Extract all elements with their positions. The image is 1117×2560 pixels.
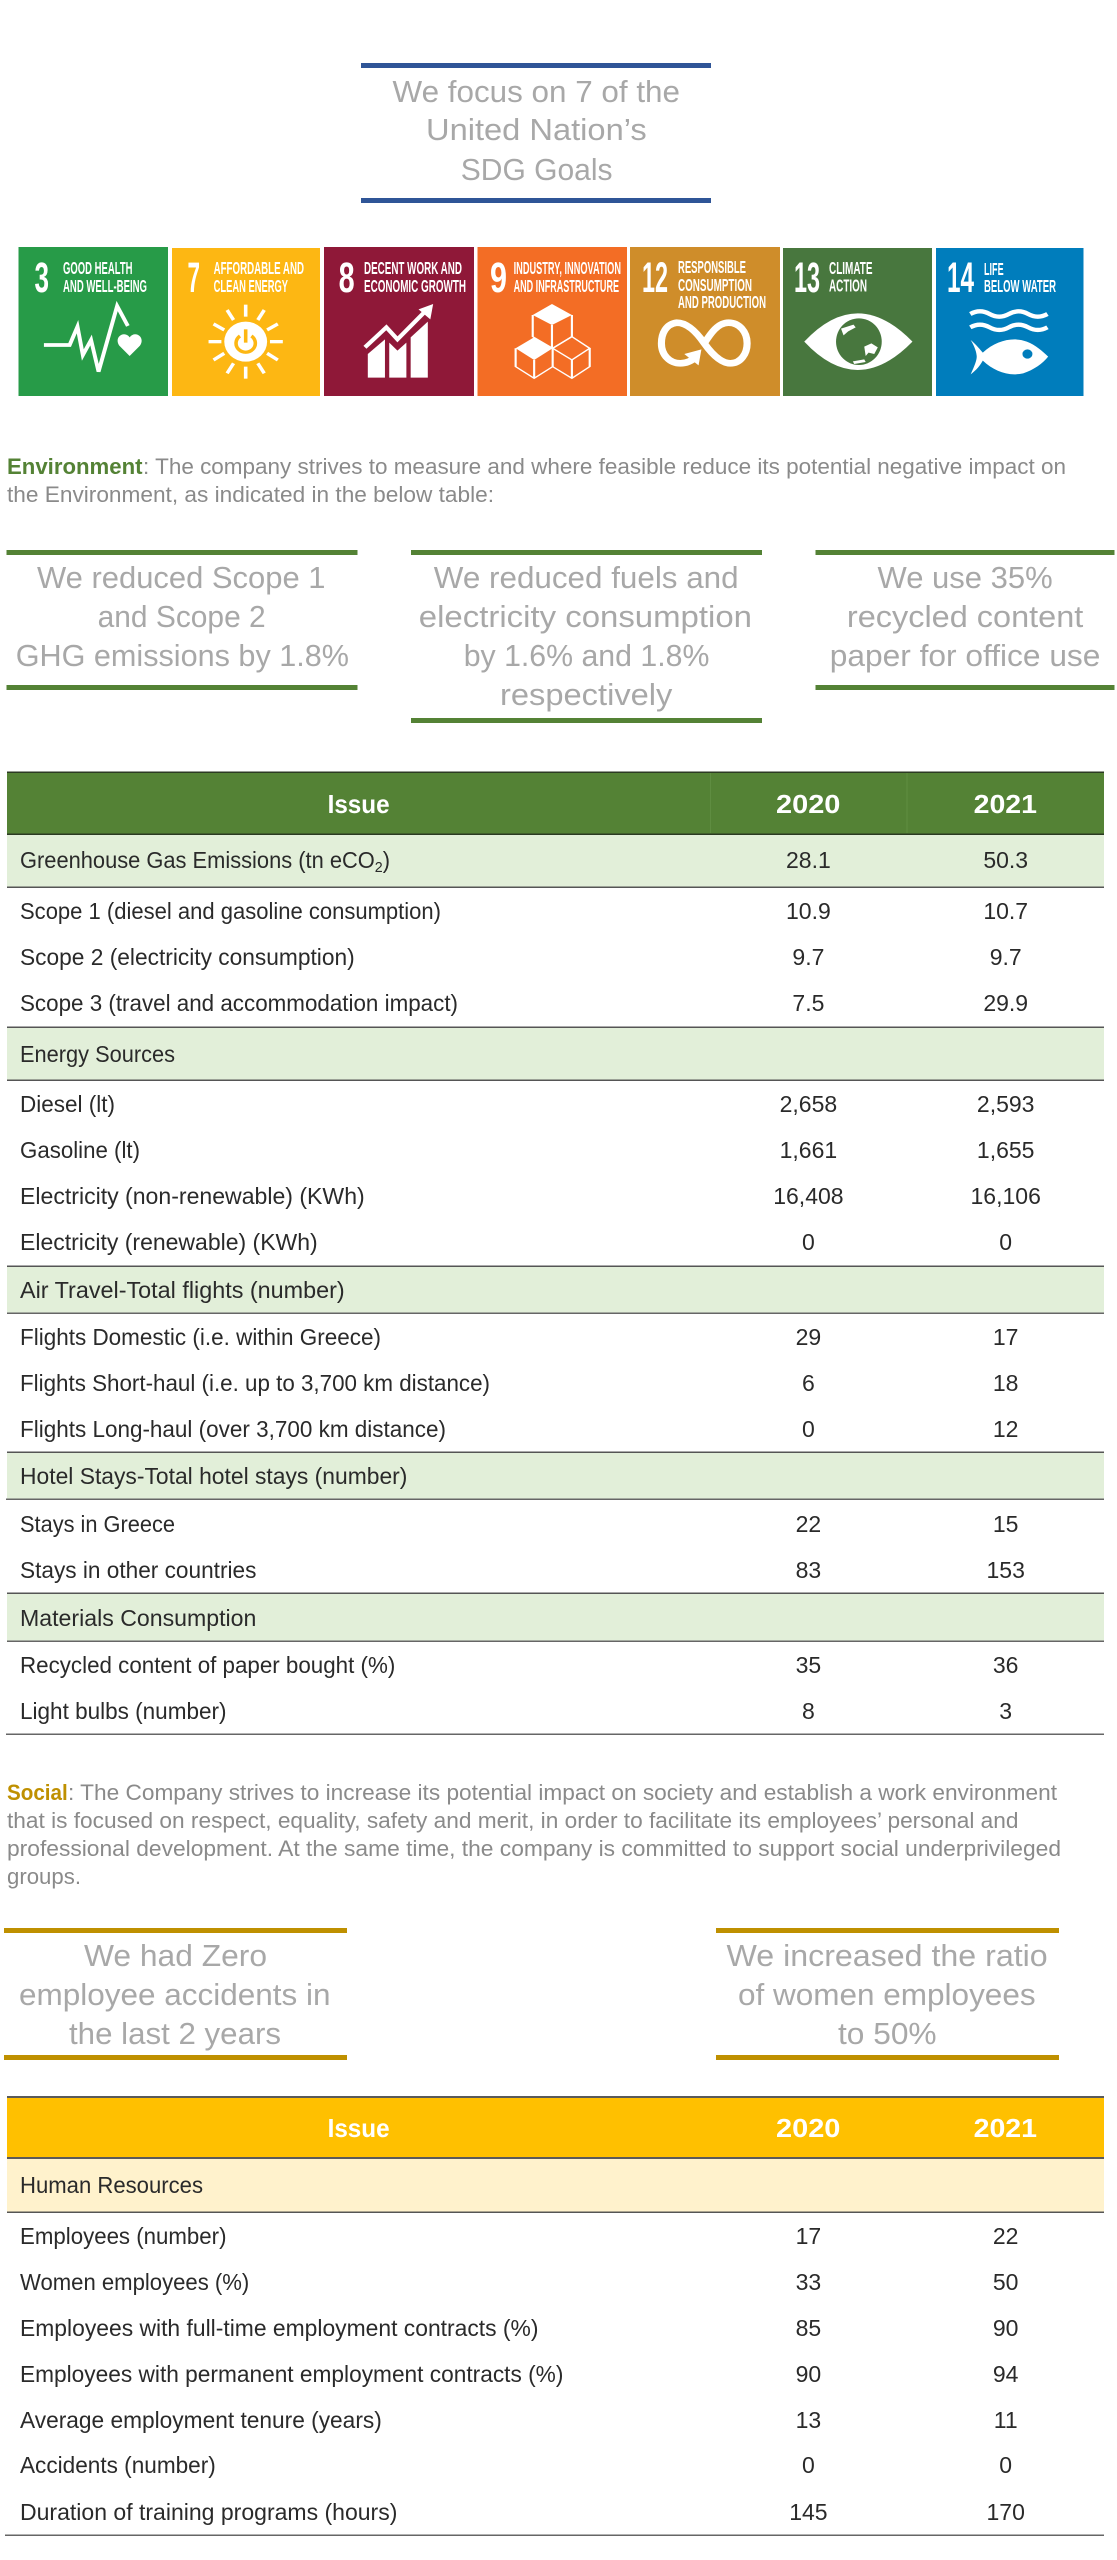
- tile: goal 14 life below water: [936, 248, 1084, 396]
- tile: goal 8 decent work and economic growth: 8: [339, 254, 355, 302]
- social intro text: Social: [7, 1780, 68, 1805]
- row: gasoline: 1,661: [780, 1137, 837, 1163]
- row: training duration: [5, 2499, 1104, 2536]
- row: permanent contracts: Employees with permanent employment contracts (%): [20, 2361, 563, 2387]
- social table header: Issue: [328, 2113, 390, 2143]
- row: accidents: 0: [999, 2452, 1012, 2478]
- tile: goal 8 decent work and economic growth: [324, 247, 474, 396]
- row: flights long-haul: 0: [802, 1416, 815, 1442]
- tile: goal 3 good health and well-being: AND WELL-BEING: [63, 276, 147, 296]
- SDG goal tiles row: [18, 247, 1084, 396]
- tile: goal 7 affordable and clean energy: CLEAN ENERGY: [214, 276, 288, 296]
- environment table header: 2021: [974, 789, 1037, 819]
- row: flights long-haul: 12: [993, 1416, 1018, 1442]
- callout: zero accidents: We had Zero: [84, 1938, 267, 1973]
- tile: goal 9 industry, innovation and infrastructure: 9: [490, 254, 507, 302]
- social table header: [7, 2096, 1104, 2159]
- row: electricity renewable: 0: [802, 1229, 815, 1255]
- row group: hotel stays: [6, 1452, 1104, 1500]
- row: accidents: 0: [802, 2452, 815, 2478]
- social table: [5, 2096, 1104, 2536]
- row group: materials consumption: Materials Consumption: [20, 1605, 256, 1631]
- row: average tenure: [20, 2407, 1018, 2433]
- row: stays in Greece: 22: [796, 1511, 821, 1537]
- row: scope 2: 9.7: [990, 944, 1022, 970]
- environment intro text: [7, 454, 1066, 507]
- row: average tenure: Average employment tenure (years): [20, 2407, 382, 2433]
- row: employees: [20, 2223, 1018, 2249]
- environment intro text: the Environment, as indicated in the below table:: [7, 482, 494, 507]
- social intro text: that is focused on respect, equality, safety and merit, in order to facilitate its employees’ personal and: [7, 1808, 1018, 1833]
- row: permanent contracts: 90: [796, 2361, 821, 2387]
- row group: greenhouse gas emissions: [7, 835, 1104, 888]
- row: flights long-haul: Flights Long-haul (over 3,700 km distance): [20, 1416, 446, 1442]
- row: permanent contracts: 94: [993, 2361, 1019, 2387]
- tile: goal 13 climate action: CLIMATE: [829, 258, 872, 278]
- row: flights domestic: [20, 1324, 1018, 1350]
- title callout: SDG goals: United Nation’s: [426, 112, 647, 147]
- row group: air travel: [7, 1266, 1104, 1314]
- row: recycled paper: 36: [993, 1652, 1018, 1678]
- tile: goal 13 climate action: ACTION: [829, 276, 867, 296]
- row: scope 1: Scope 1 (diesel and gasoline consumption): [20, 898, 441, 924]
- callout: GHG emissions reduced: [6, 550, 358, 690]
- row: electricity non-renewable: 16,408: [773, 1183, 844, 1209]
- environment intro text: Environment: [7, 454, 143, 479]
- row: scope 2: Scope 2 (electricity consumption): [20, 944, 355, 970]
- callout: recycled paper: recycled content: [847, 599, 1084, 634]
- row: electricity renewable: 0: [999, 1229, 1012, 1255]
- callout: zero accidents: the last 2 years: [69, 2016, 281, 2051]
- row: electricity non-renewable: Electricity (non-renewable) (KWh): [20, 1183, 365, 1209]
- row: flights short-haul: 6: [802, 1370, 815, 1396]
- tile: goal 9 industry, innovation and infrastructure: AND INFRASTRUCTURE: [514, 276, 619, 296]
- tile: goal 12 responsible consumption and production: CONSUMPTION: [678, 275, 752, 295]
- environment table header: Issue: [328, 789, 390, 819]
- row: employees: 17: [796, 2223, 821, 2249]
- row: women employees: Women employees (%): [20, 2269, 249, 2295]
- row: training duration: Duration of training programs (hours): [20, 2499, 397, 2525]
- tile: goal 3 good health and well-being: 3: [34, 254, 49, 302]
- tile: goal 9 industry, innovation and infrastructure: INDUSTRY, INNOVATION: [514, 258, 621, 278]
- row: flights short-haul: 18: [993, 1370, 1018, 1396]
- callout: women employees ratio: We increased the ratio: [726, 1938, 1048, 1973]
- row: stays in other countries: Stays in other countries: [20, 1557, 256, 1583]
- row: average tenure: 11: [994, 2407, 1018, 2433]
- row: gasoline: [20, 1137, 1034, 1163]
- social table header: 2020: [776, 2113, 840, 2143]
- callout: women employees ratio: of women employees: [738, 1977, 1036, 2012]
- row group: human resources: [7, 2159, 1104, 2213]
- callout: women employees ratio: to 50%: [838, 2016, 937, 2051]
- tile: goal 7 affordable and clean energy: [172, 248, 320, 396]
- row: flights domestic: Flights Domestic (i.e. within Greece): [20, 1324, 381, 1350]
- callout: recycled paper: We use 35%: [878, 560, 1053, 595]
- row: scope 1: 10.9: [786, 898, 831, 924]
- row group: greenhouse gas emissions: 2: [375, 859, 383, 876]
- row: training duration: 170: [987, 2499, 1025, 2525]
- row: accidents: [20, 2452, 1012, 2478]
- callout: recycled paper: paper for office use: [830, 638, 1100, 673]
- environment intro text: : The company strives to measure and where feasible reduce its potential negative impact on: [143, 454, 1066, 479]
- row: recycled paper: 35: [796, 1652, 821, 1678]
- tile: goal 9 industry, innovation and infrastructure: [478, 247, 627, 396]
- tile: goal 3 good health and well-being: [18, 247, 168, 396]
- row: electricity renewable: [20, 1229, 1012, 1255]
- callout: zero accidents: employee accidents in: [19, 1977, 330, 2012]
- row: recycled paper: [20, 1652, 1018, 1678]
- row: full-time contracts: 85: [796, 2315, 821, 2341]
- row: diesel: 2,658: [780, 1091, 837, 1117]
- callout: GHG emissions reduced: and Scope 2: [98, 599, 266, 634]
- row: stays in Greece: 15: [993, 1511, 1018, 1537]
- title callout: SDG goals: [361, 63, 711, 203]
- row: scope 2: 9.7: [792, 944, 824, 970]
- row: women employees: 33: [796, 2269, 821, 2295]
- row: scope 3: Scope 3 (travel and accommodation impact): [20, 990, 458, 1016]
- row: employees: 22: [993, 2223, 1018, 2249]
- tile: goal 8 decent work and economic growth: DECENT WORK AND: [364, 258, 462, 278]
- row group: greenhouse gas emissions: ): [383, 847, 390, 873]
- social intro text: : The Company strives to increase its potential impact on society and establish a work environment: [68, 1780, 1057, 1805]
- callout: fuels and electricity reduced: [411, 550, 762, 723]
- row group: greenhouse gas emissions: Greenhouse Gas Emissions (tn eCO: [20, 847, 393, 873]
- row: flights long-haul: [20, 1416, 1018, 1442]
- row: scope 1: [20, 898, 1028, 924]
- row: scope 3: 7.5: [792, 990, 824, 1016]
- row: electricity non-renewable: [20, 1183, 1041, 1209]
- row: full-time contracts: 90: [993, 2315, 1018, 2341]
- tile: goal 14 life below water: LIFE: [984, 259, 1004, 279]
- row group: materials consumption: [7, 1592, 1104, 1642]
- callout: fuels and electricity reduced: electricity consumption: [419, 599, 752, 634]
- row: scope 1: 10.7: [983, 898, 1028, 924]
- callout: fuels and electricity reduced: by 1.6% and 1.8%: [464, 638, 709, 673]
- tile: goal 14 life below water: BELOW WATER: [984, 276, 1056, 296]
- social intro text: groups.: [7, 1864, 81, 1889]
- row group: greenhouse gas emissions: 50.3: [983, 847, 1028, 873]
- row: scope 2: [20, 944, 1022, 970]
- callout: recycled paper: [816, 550, 1114, 690]
- row: electricity non-renewable: 16,106: [971, 1183, 1041, 1209]
- row: gasoline: 1,655: [977, 1137, 1034, 1163]
- row: accidents: Accidents (number): [20, 2452, 216, 2478]
- social table header: 2021: [974, 2113, 1037, 2143]
- tile: goal 12 responsible consumption and production: 12: [642, 254, 668, 302]
- tile: goal 13 climate action: 13: [794, 254, 820, 302]
- callout: GHG emissions reduced: We reduced Scope 1: [37, 560, 326, 595]
- row: recycled paper: Recycled content of paper bought (%): [20, 1652, 395, 1678]
- callout: fuels and electricity reduced: respectively: [500, 677, 673, 712]
- social intro text: professional development. At the same time, the company is committed to support social underprivileged: [7, 1836, 1061, 1861]
- tile: goal 13 climate action: [783, 248, 932, 396]
- tile: goal 14 life below water: 14: [947, 254, 974, 302]
- row: diesel: 2,593: [977, 1091, 1034, 1117]
- row group: energy sources: Energy Sources: [20, 1041, 175, 1067]
- row group: hotel stays: Hotel Stays-Total hotel stays (number): [20, 1463, 407, 1489]
- tile: goal 8 decent work and economic growth: ECONOMIC GROWTH: [364, 276, 466, 296]
- row: light bulbs: 8: [802, 1698, 815, 1724]
- tile: goal 7 affordable and clean energy: AFFORDABLE AND: [214, 258, 304, 278]
- callout: GHG emissions reduced: GHG emissions by 1.8%: [16, 638, 349, 673]
- row: full-time contracts: Employees with full-time employment contracts (%): [20, 2315, 538, 2341]
- row: light bulbs: 3: [999, 1698, 1012, 1724]
- tile: goal 7 affordable and clean energy: 7: [188, 254, 200, 302]
- row: scope 3: [20, 990, 1028, 1016]
- social intro text: [7, 1780, 1061, 1889]
- title callout: SDG goals: SDG Goals: [461, 152, 612, 187]
- row group: human resources: Human Resources: [20, 2172, 203, 2198]
- callout: women employees ratio: [716, 1928, 1059, 2060]
- row: scope 3: 29.9: [983, 990, 1028, 1016]
- row: light bulbs: [6, 1698, 1104, 1735]
- row: flights domestic: 17: [993, 1324, 1018, 1350]
- row: diesel: [20, 1091, 1034, 1117]
- callout: fuels and electricity reduced: We reduced fuels and: [434, 560, 739, 595]
- row: employees: Employees (number): [20, 2223, 226, 2249]
- environment table header: [7, 772, 1104, 835]
- row: training duration: 145: [789, 2499, 828, 2525]
- row: flights short-haul: Flights Short-haul (i.e. up to 3,700 km distance): [20, 1370, 490, 1396]
- tile: goal 12 responsible consumption and production: RESPONSIBLE: [678, 257, 746, 277]
- row group: greenhouse gas emissions: 28.1: [786, 847, 831, 873]
- row group: air travel: Air Travel-Total flights (number): [20, 1277, 345, 1303]
- row: stays in other countries: 83: [796, 1557, 821, 1583]
- row: full-time contracts: [20, 2315, 1018, 2341]
- row: stays in Greece: [20, 1511, 1018, 1537]
- row: electricity renewable: Electricity (renewable) (KWh): [20, 1229, 318, 1255]
- row: gasoline: Gasoline (lt): [20, 1137, 140, 1163]
- row: permanent contracts: [20, 2361, 1019, 2387]
- row: women employees: [20, 2269, 1018, 2295]
- environment table: [6, 772, 1104, 1735]
- row group: energy sources: [7, 1026, 1104, 1081]
- row: stays in other countries: 153: [987, 1557, 1025, 1583]
- row: stays in other countries: [20, 1557, 1025, 1583]
- row: flights short-haul: [20, 1370, 1018, 1396]
- row: flights domestic: 29: [796, 1324, 821, 1350]
- title callout: SDG goals: We focus on 7 of the: [392, 74, 680, 109]
- row: women employees: 50: [993, 2269, 1018, 2295]
- row: average tenure: 13: [796, 2407, 821, 2433]
- tile: goal 12 responsible consumption and production: AND PRODUCTION: [678, 292, 766, 312]
- tile: goal 12 responsible consumption and production: [630, 247, 780, 396]
- row: diesel: Diesel (lt): [20, 1091, 115, 1117]
- callout: zero accidents: [4, 1928, 347, 2060]
- environment table header: 2020: [776, 789, 840, 819]
- row: stays in Greece: Stays in Greece: [20, 1511, 175, 1537]
- tile: goal 3 good health and well-being: GOOD HEALTH: [63, 258, 132, 278]
- row: light bulbs: Light bulbs (number): [20, 1698, 226, 1724]
